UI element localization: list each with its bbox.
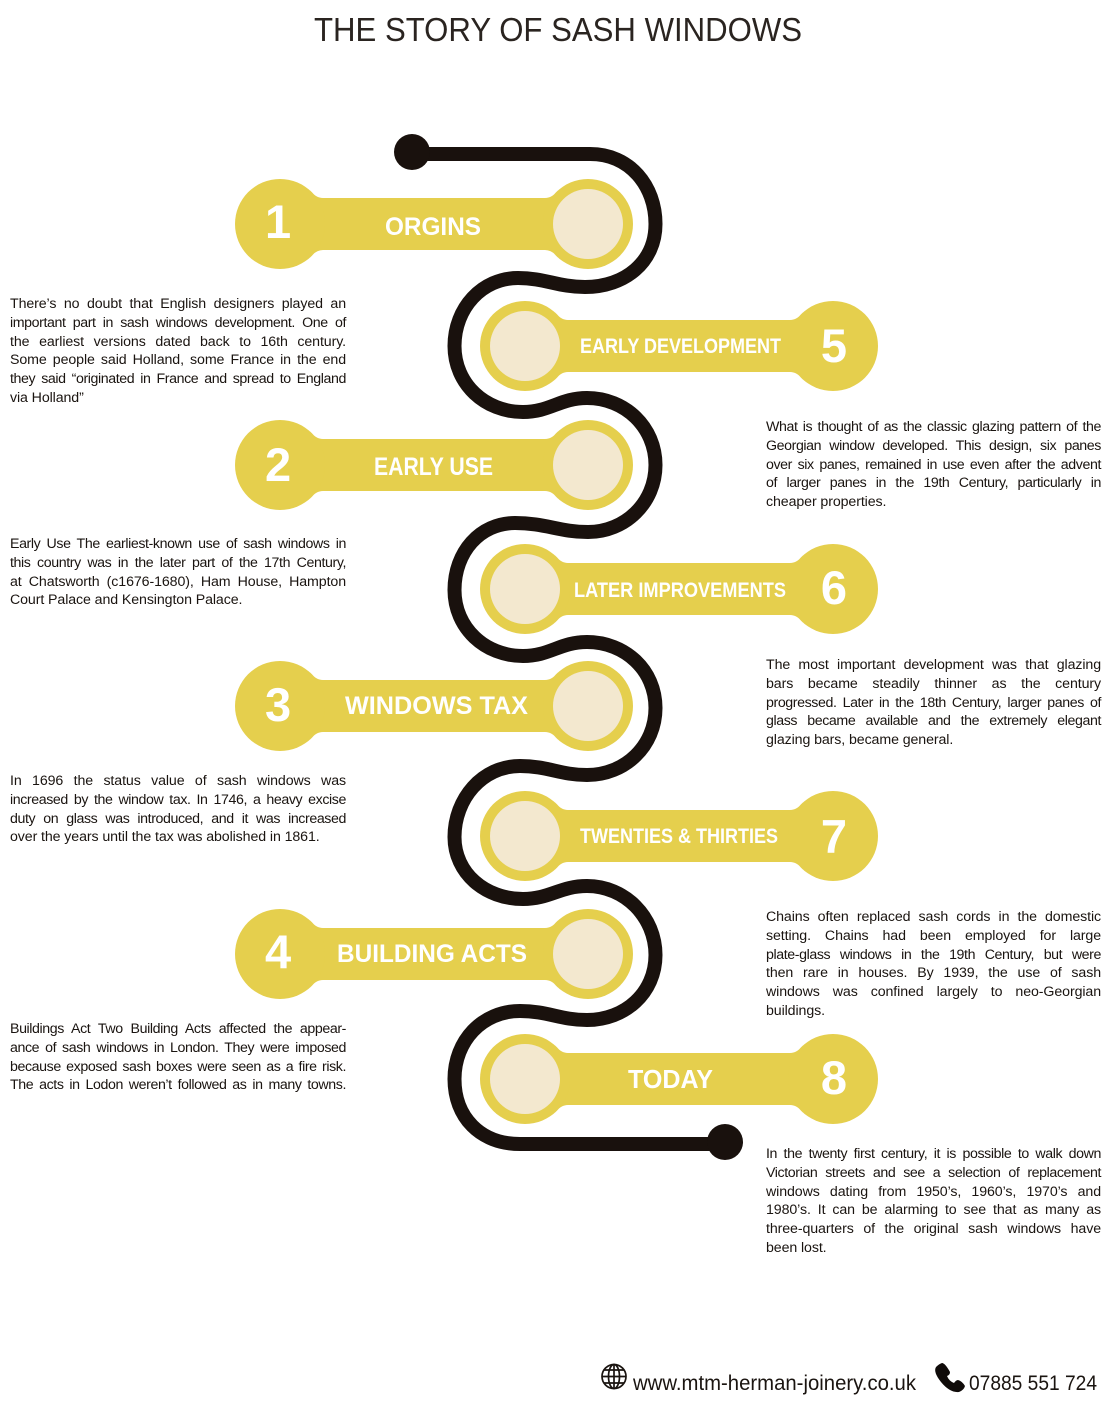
text: windows tax description: [10, 773, 346, 845]
icon: telephone: [935, 1363, 965, 1392]
text: early use description: at Chatsworth (c1676-1680), Ham House, Hampton: [10, 574, 346, 590]
text: early use description: [10, 536, 346, 608]
step 4 pill: Building Acts: [235, 909, 633, 999]
text: origins description: they said “originated in France and spread to England: [10, 371, 346, 387]
text: today description: In the twenty first century, it is possible to walk down: [766, 1146, 1101, 1162]
step 1 pill: Orgins: [235, 179, 633, 269]
step 1 pill: Orgins: ORGINS: [385, 213, 481, 241]
text: origins description: important part in sash windows development. One of: [10, 315, 346, 331]
step 6 pill: Later Improvements: [480, 544, 878, 634]
step 3 pill: Windows Tax: 3: [265, 678, 291, 731]
text: early development description: [766, 419, 1102, 510]
text: later improvements description: progressed. Later in the 18th Century, larger panes of: [766, 694, 1101, 710]
step 8 pill: Today: TODAY: [628, 1064, 713, 1094]
text: twenties and thirties description: buildings.: [766, 1003, 825, 1019]
text: today description: been lost.: [766, 1240, 827, 1256]
text: today description: [766, 1146, 1102, 1256]
text: building acts description: because exposed sash boxes were seen as a fire risk.: [10, 1058, 346, 1074]
website: www.mtm-herman-joinery.co.uk: [632, 1372, 916, 1395]
step 2 pill: Early Use: 2: [265, 438, 291, 491]
step 8 pill: Today: [480, 1034, 878, 1124]
text: later improvements description: [766, 657, 1102, 748]
text: origins description: via Holland”: [10, 390, 84, 406]
text: twenties and thirties description: setting. Chains had been employed for large: [766, 928, 1101, 944]
text: early use description: Court Palace and Kensington Palace.: [10, 592, 242, 608]
text: early use description: Early Use The earliest-known use of sash windows in: [10, 536, 346, 552]
text: later improvements description: bars became steadily thinner as the century: [766, 676, 1101, 692]
text: later improvements description: glazing bars, became general.: [766, 732, 953, 748]
text: today description: Victorian streets and see a selection of replacement: [766, 1165, 1101, 1181]
text: early development description: What is thought of as the classic glazing pattern of the: [766, 419, 1101, 435]
text: building acts description: Buildings Act Two Building Acts affected the appear-: [10, 1021, 346, 1037]
winding timeline path: [394, 134, 743, 1160]
phone number: 07885 551 724: [969, 1372, 1097, 1395]
step 8 pill: Today: 8: [821, 1051, 847, 1104]
step 5 pill: Early Development: EARLY DEVELOPMENT: [580, 335, 781, 358]
step 4 pill: Building Acts: BUILDING ACTS: [337, 940, 527, 968]
step 3 pill: Windows Tax: [235, 661, 633, 751]
text: early development description: over six panes, remained in use even after the advent: [766, 456, 1101, 472]
text: today description: windows dating from 1950’s, 1960’s, 1970’s and: [766, 1184, 1101, 1200]
step 2 pill: Early Use: EARLY USE: [374, 453, 493, 481]
text: building acts description: ance of sash windows in London. They were imposed: [10, 1040, 346, 1056]
text: origins description: Some people said Holland, some France in the end: [10, 352, 346, 368]
text: origins description: the earliest versions dated back to 16th century.: [10, 334, 346, 350]
step 2 pill: Early Use: [235, 420, 633, 510]
text: windows tax description: over the years until the tax was abolished in 1861.: [10, 829, 320, 845]
text: building acts description: [10, 1021, 346, 1093]
text: early development description: of larger panes in the 19th Century, particularly in: [766, 475, 1101, 491]
step 7 pill: Twenties & Thirties: TWENTIES & THIRTIES: [580, 825, 778, 848]
step 1 pill: Orgins: 1: [265, 195, 291, 248]
step 5 pill: Early Development: [480, 301, 878, 391]
step 4 pill: Building Acts: 4: [265, 925, 291, 978]
text: windows tax description: duty on glass was introduced, and it was increased: [10, 810, 346, 826]
step 3 pill: Windows Tax: WINDOWS TAX: [345, 692, 528, 720]
text: today description: three-quarters of the original sash windows have: [766, 1221, 1101, 1237]
text: origins description: [10, 296, 346, 406]
text: early development description: Georgian window developed. This design, six panes: [766, 438, 1101, 454]
text: later improvements description: glass became available and the extremely elegant: [766, 713, 1101, 729]
text: building acts description: The acts in Lodon weren’t followed as in many towns.: [10, 1077, 346, 1093]
text: windows tax description: increased by the window tax. In 1746, a heavy excise: [10, 792, 346, 808]
text: twenties and thirties description: [766, 909, 1101, 1019]
step 7 pill: Twenties & Thirties: [480, 791, 878, 881]
step 7 pill: Twenties & Thirties: 7: [821, 810, 847, 863]
text: today description: 1980’s. It can be alarming to see that as many as: [766, 1202, 1101, 1218]
text: windows tax description: In 1696 the status value of sash windows was: [10, 773, 346, 789]
title: THE STORY OF SASH WINDOWS: [314, 11, 802, 48]
icon: globe: [602, 1364, 626, 1388]
text: twenties and thirties description: Chains often replaced sash cords in the domestic: [766, 909, 1101, 925]
step 5 pill: Early Development: 5: [821, 319, 847, 372]
step 6 pill: Later Improvements: 6: [821, 561, 847, 614]
text: early use description: this country was in the later part of the 17th Century,: [10, 555, 346, 571]
text: twenties and thirties description: windows was confined largely to neo-Georgian: [766, 984, 1101, 1000]
step 6 pill: Later Improvements: LATER IMPROVEMENTS: [574, 579, 786, 602]
text: early development description: cheaper properties.: [766, 494, 886, 510]
text: twenties and thirties description: then rare in houses. By 1939, the use of sash: [766, 965, 1101, 981]
text: origins description: There’s no doubt that English designers played an: [10, 296, 346, 312]
text: later improvements description: The most important development was that glazing: [766, 657, 1101, 673]
text: twenties and thirties description: plate-glass windows in the 19th Century, but were: [766, 946, 1101, 962]
